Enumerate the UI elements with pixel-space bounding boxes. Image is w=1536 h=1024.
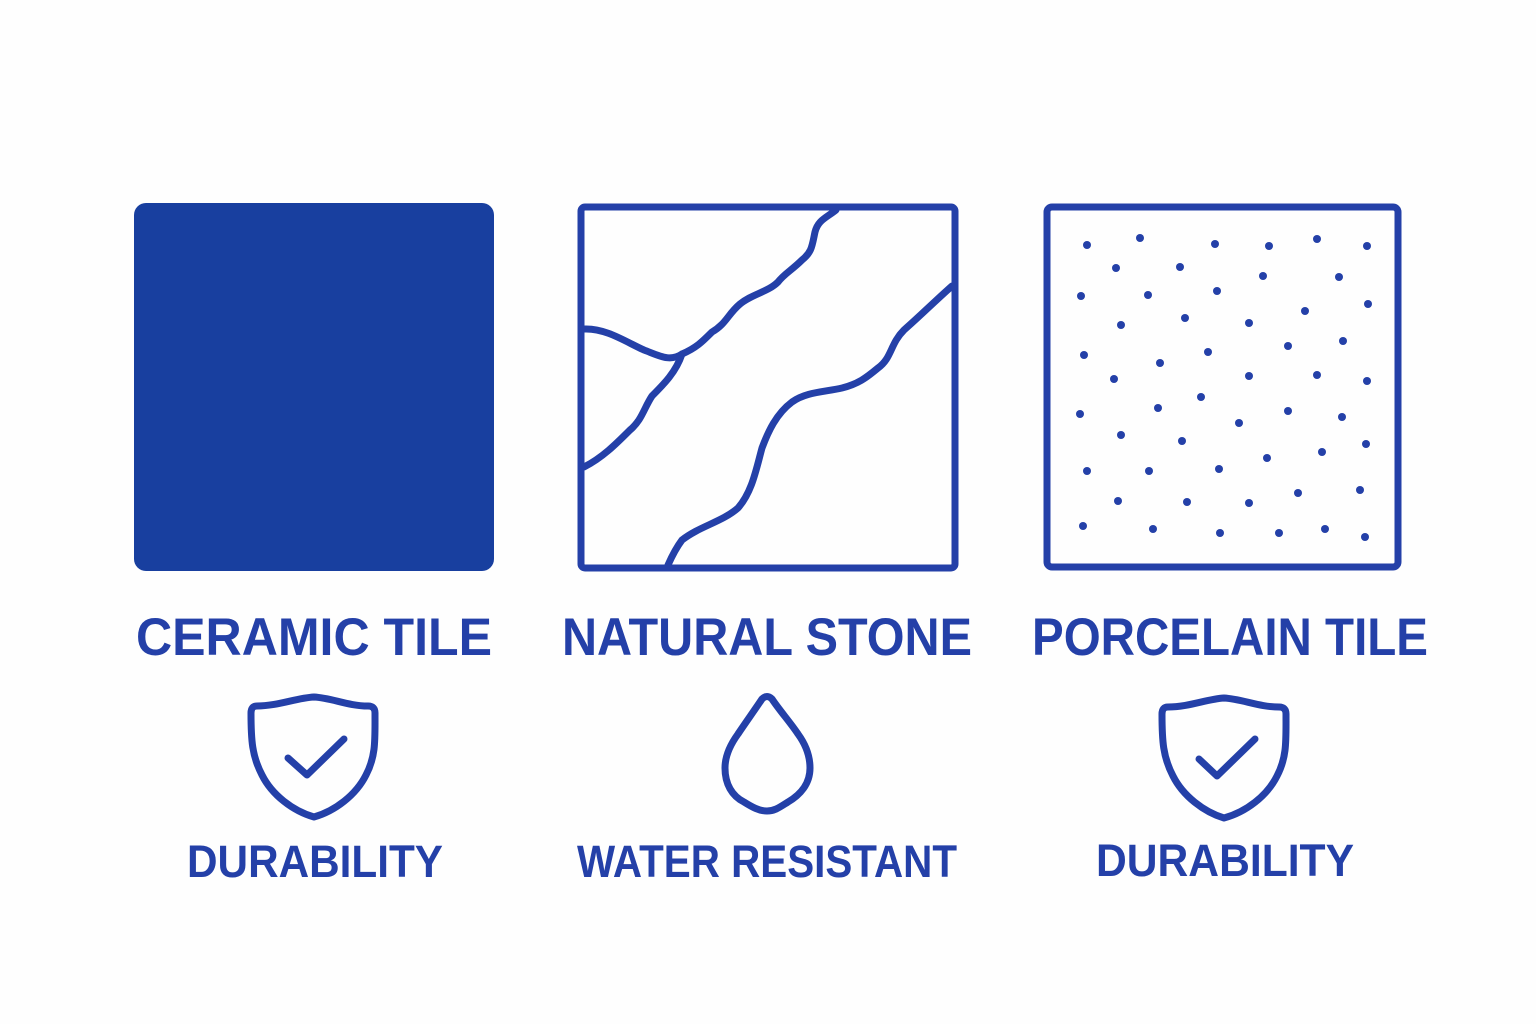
porcelain tile speckled square [1047,207,1398,567]
icon: shield durability [1162,698,1286,818]
durability label: DURABILITY [187,836,443,887]
water resistant label: WATER RESISTANT [577,836,957,887]
panel: ceramic tile [134,203,494,887]
icon: shield durability [251,697,375,817]
icon: water drop [725,696,810,811]
natural stone tile with veins [581,207,955,568]
ceramic tile heading: CERAMIC TILE [136,608,492,667]
natural stone heading: NATURAL STONE [562,608,972,667]
durability label: DURABILITY [1096,835,1354,886]
panel: porcelain tile [1032,207,1428,886]
panel: natural stone [562,207,972,887]
porcelain tile heading: PORCELAIN TILE [1032,608,1428,667]
ceramic tile square [134,203,494,571]
